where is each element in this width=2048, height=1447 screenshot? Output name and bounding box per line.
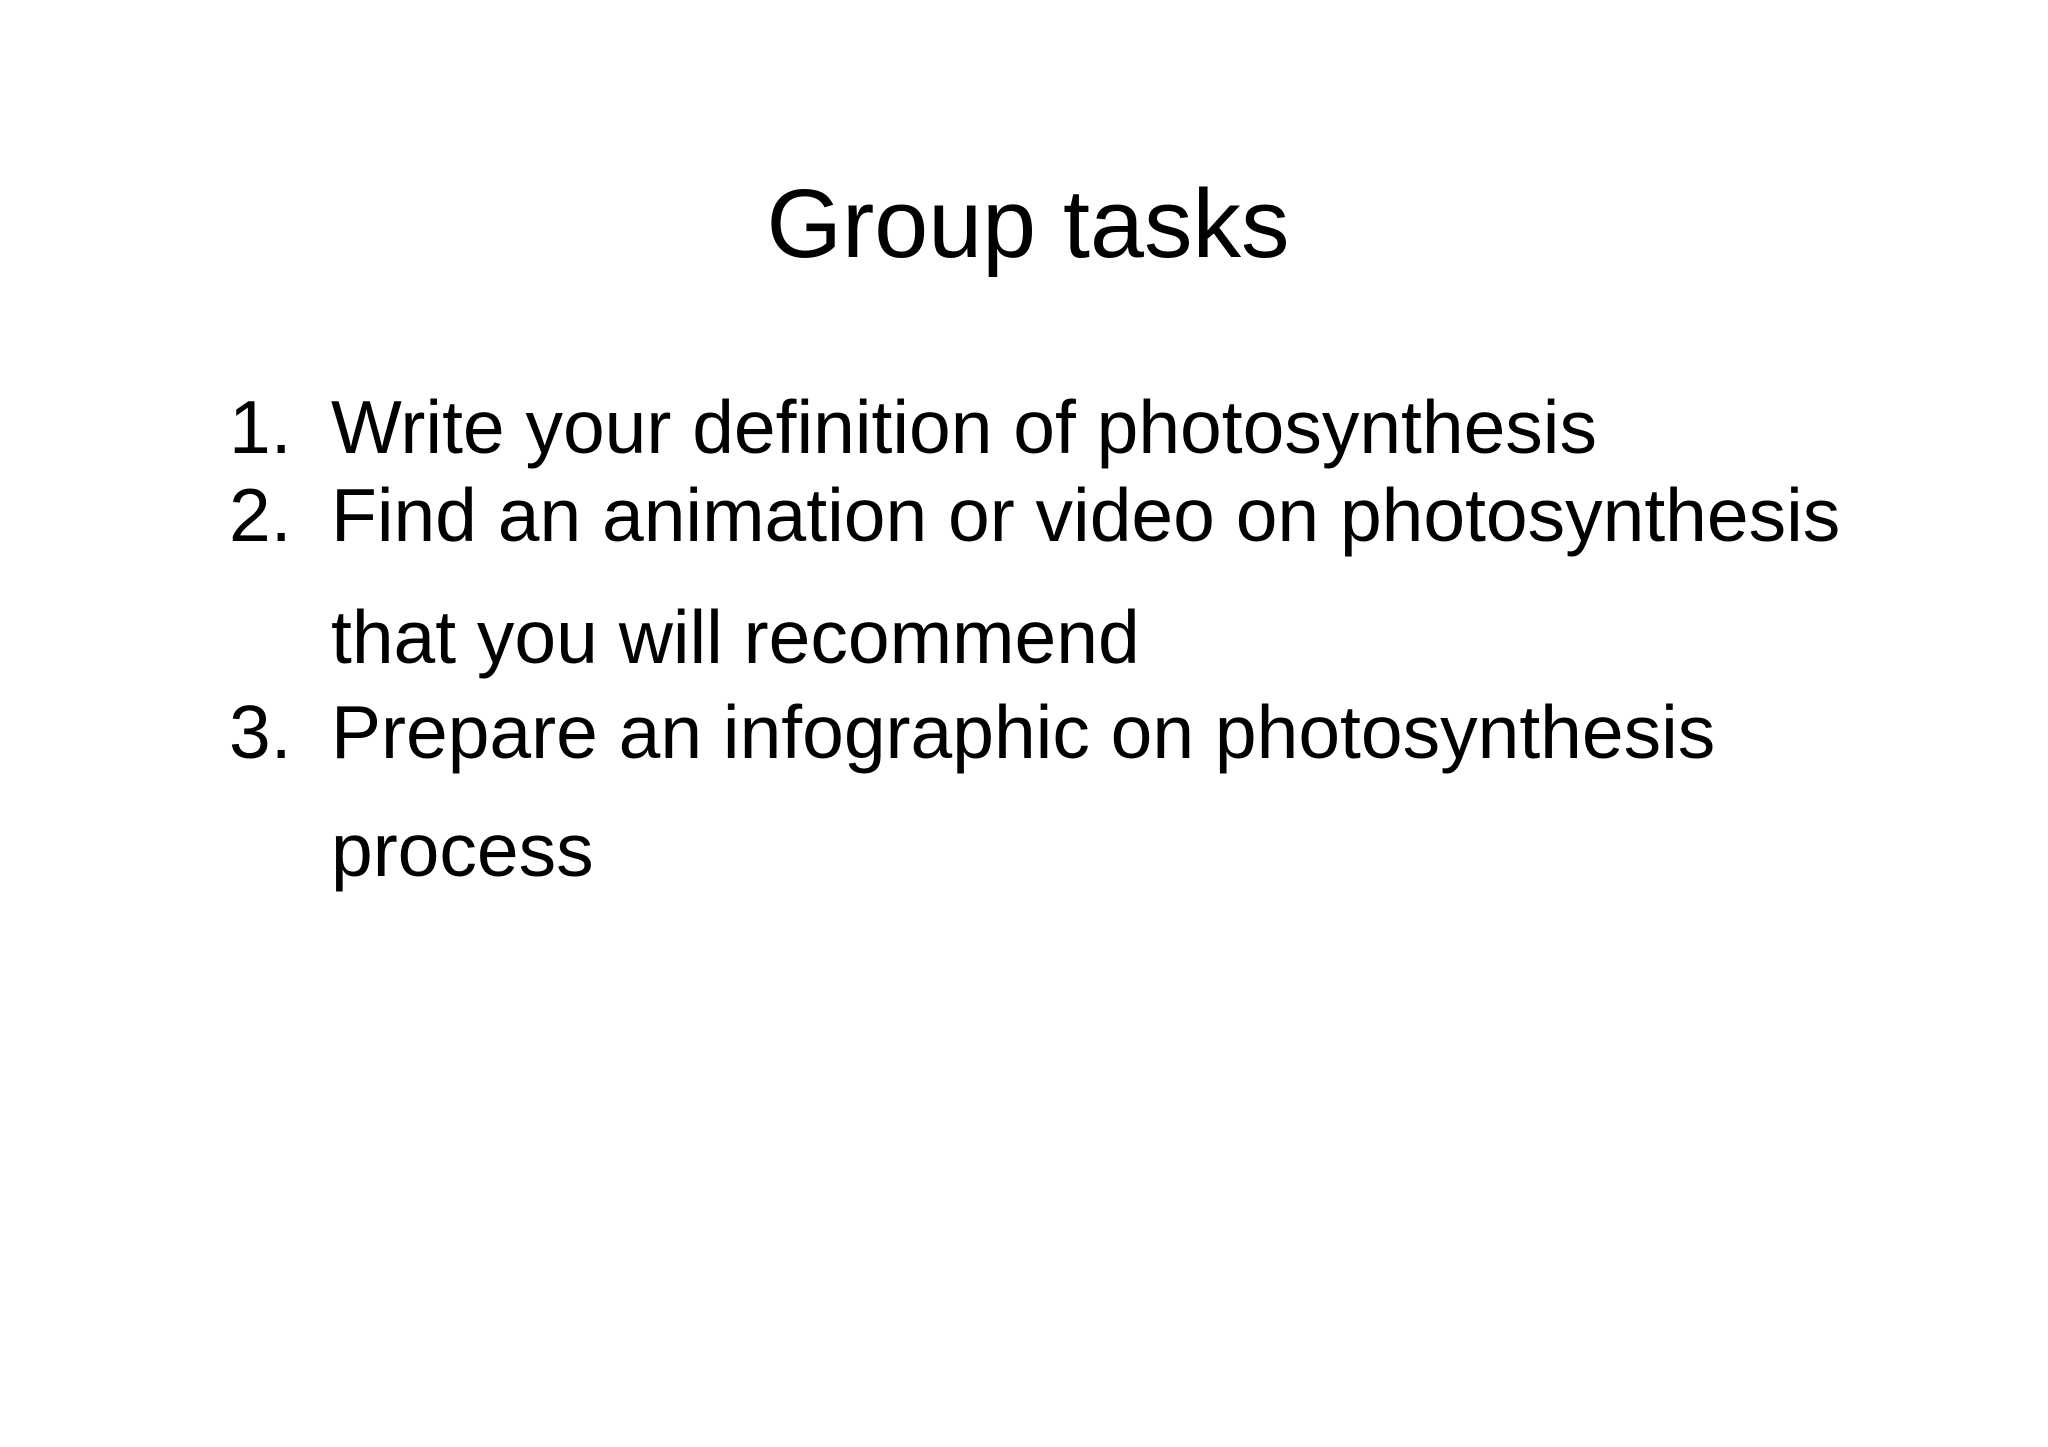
- item 1 text: Write your definition of photosynthesis: [331, 385, 1597, 469]
- title: Group tasks: [767, 169, 1289, 278]
- item 2 text: [331, 473, 1840, 679]
- item 3 number: 3.: [229, 690, 292, 774]
- item 2 number: 2.: [229, 473, 292, 557]
- item 3 text: [331, 690, 1715, 892]
- item 2 text: that you will recommend: [331, 595, 1140, 679]
- item 1 number: 1.: [229, 385, 292, 469]
- item 3 text: process: [331, 808, 594, 892]
- list: group tasks: [229, 385, 1840, 892]
- item 3 text: Prepare an infographic on photosynthesis: [331, 690, 1715, 774]
- item 2 text: Find an animation or video on photosynthesis: [331, 473, 1840, 557]
